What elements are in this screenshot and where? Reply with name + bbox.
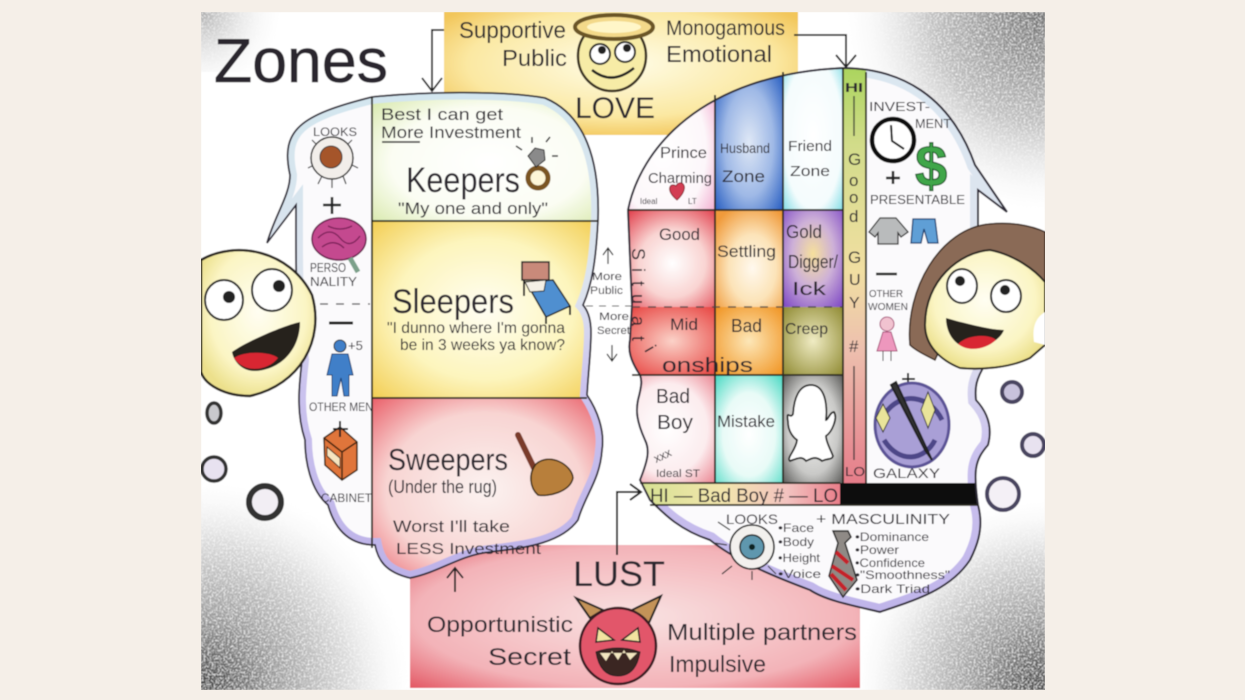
good guy scale: d: [849, 207, 858, 226]
plus sign: [886, 171, 900, 184]
text: monogamous emotional: Emotional: [666, 41, 772, 67]
middle labels: more public more secret: Secret: [597, 325, 630, 337]
section: masculinity list: •"Smoothness": [855, 568, 950, 582]
icon: left man's face: [201, 250, 315, 396]
panel: left head: [267, 90, 607, 583]
cell labels: top row: Charming: [648, 170, 712, 187]
cell labels: middle rows: Good: [659, 225, 700, 244]
icon: blue man: [327, 338, 363, 396]
label: situationships: [628, 248, 753, 377]
icon: diamond ring: [516, 137, 558, 188]
thought bubbles: left: [202, 403, 281, 518]
middle labels: more public more secret: More: [599, 311, 629, 323]
label: personality: [310, 262, 357, 287]
label: other women: WOMEN: [868, 302, 908, 313]
icon: galaxy: [875, 373, 949, 467]
label: situationships: i: [628, 268, 648, 272]
text: lust: LUST: [573, 555, 665, 594]
sweepers text: LESS Investment: [396, 541, 542, 558]
panel: right head: [620, 60, 1007, 612]
icon: ghost: [787, 385, 835, 461]
sleepers text: "I dunno where I'm gonna: [387, 320, 565, 337]
cell labels: middle rows: Creep: [785, 321, 828, 338]
good guy scale: [845, 80, 865, 479]
icon: bed: [522, 262, 570, 324]
section: masculinity list: •Power: [855, 543, 899, 557]
middle labels: more public more secret: Public: [590, 285, 624, 297]
icon: heart: [670, 183, 684, 200]
arrow: lust to right head: [617, 484, 641, 555]
icon: angel face: [575, 15, 653, 91]
cell labels: bottom row: [651, 386, 775, 480]
sweepers text: Worst I'll take: [393, 517, 510, 536]
good guy scale: HI: [845, 80, 863, 95]
label: personality: NALITY: [310, 274, 357, 289]
paper sheet: [201, 12, 1045, 690]
zone: sweepers fill: [372, 398, 596, 572]
good guy scale: o: [849, 188, 858, 207]
cell labels: middle rows: Bad: [731, 316, 762, 336]
good guy scale: G: [848, 248, 861, 267]
section: masculinity list: + MASCULINITY: [816, 511, 950, 528]
text: monogamous emotional: [666, 20, 785, 63]
section: looks list: LOOKS: [726, 511, 778, 527]
icon: broom and dirt pile: [518, 435, 573, 495]
middle labels: more public more secret: More: [592, 271, 622, 283]
keepers text: "My one and only": [398, 199, 548, 218]
cell labels: top row: [640, 138, 832, 206]
icon: shirt: [869, 218, 908, 244]
good guy scale: U: [849, 272, 861, 289]
icon: tie: [829, 531, 857, 597]
cell labels: middle rows: Gold: [786, 222, 822, 242]
thought bubbles: right: [987, 382, 1044, 510]
icon: pants: [911, 219, 938, 243]
cell labels: bottom row: Boy: [657, 412, 693, 434]
text: multiple partners impulsive: Impulsive: [669, 651, 766, 677]
cell labels: middle rows: Ick: [792, 279, 827, 299]
sleepers text: Sleepers: [392, 283, 514, 321]
label: investment: MENT: [915, 116, 951, 131]
label: situationships: t: [628, 281, 648, 286]
cell labels: top row: Friend: [788, 138, 832, 155]
cell labels: top row: Zone: [722, 167, 765, 186]
panel: love box: [444, 12, 798, 135]
zone: keepers fill: [372, 100, 592, 221]
icon: eye: [308, 137, 358, 188]
label: situationships: i: [641, 342, 660, 355]
section: masculinity list: •Confidence: [855, 556, 925, 570]
cell labels: top row: Husband: [720, 140, 770, 156]
good guy scale: Y: [849, 295, 860, 312]
cell labels: bottom row: xxx: [651, 445, 674, 466]
label: situationships: S: [628, 248, 648, 260]
cell labels: top row: Zone: [790, 163, 830, 180]
good guy scale: G: [848, 150, 861, 169]
cell labels: middle rows: Digger/: [788, 252, 838, 272]
sweepers text: (Under the rug): [388, 477, 497, 497]
text: title zones: Zones: [214, 27, 388, 96]
pencil-shaded corners: [201, 12, 1045, 690]
label: situationships: t: [628, 336, 648, 341]
label: galaxy: GALAXY: [873, 465, 941, 481]
text: multiple partners impulsive: Multiple partners: [667, 619, 857, 645]
keepers text: Keepers: [406, 161, 520, 200]
text: supportive public: Public: [502, 45, 567, 71]
cell labels: middle rows: Mid: [670, 315, 698, 334]
sleepers text: be in 3 weeks ya know?: [400, 337, 565, 354]
keepers text: Best I can get: [381, 105, 503, 124]
keepers text: [381, 105, 548, 218]
bad boy scale: HI — Bad Boy # — LO: [650, 486, 838, 507]
section: looks list: •Body: [778, 535, 814, 549]
icon: dollar sign: $: [915, 134, 947, 199]
section: looks list: •Height: [778, 551, 821, 565]
text: supportive public: [460, 20, 567, 67]
cell labels: bottom row: Mistake: [717, 412, 775, 431]
cell labels: bottom row: Ideal ST: [656, 468, 700, 480]
cell labels: middle rows: Settling: [717, 242, 776, 261]
label: presentable: PRESENTABLE: [870, 192, 965, 207]
text: opportunistic secret: Secret: [488, 644, 571, 671]
cell labels: bottom row: Bad: [656, 386, 690, 408]
label: cabinet: CABINET: [321, 491, 373, 505]
sleepers text: [387, 283, 565, 354]
cell labels: top row: Ideal: [640, 197, 658, 206]
cell labels: middle rows: [659, 222, 838, 338]
section: looks list: [714, 511, 821, 581]
sweepers text: [388, 442, 542, 558]
icon: clock: [872, 119, 914, 161]
section: masculinity list: [816, 511, 950, 597]
label: investment: INVEST-: [869, 99, 930, 114]
label: investment: [869, 99, 951, 131]
label: personality: PERSO: [310, 260, 346, 275]
panel: lust box: [410, 545, 860, 688]
section: looks list: •Face: [778, 521, 814, 535]
good guy scale: o: [849, 171, 858, 190]
label: situationships: onships: [662, 355, 753, 377]
icon: brain: [312, 218, 366, 272]
cell labels: top row: Prince: [660, 145, 707, 162]
label: other women: [868, 289, 908, 313]
icon: devil face: [576, 596, 661, 684]
text: opportunistic secret: Opportunistic: [427, 612, 573, 637]
arrow: love to right head: [794, 35, 856, 67]
icon: pink woman: [877, 317, 897, 361]
icon: blue eye: [714, 522, 776, 580]
text: monogamous emotional: Monogamous: [666, 17, 785, 40]
label: situationships: a: [628, 316, 648, 327]
good guy scale: LO: [845, 464, 865, 479]
icon: woman's face with hair: [910, 223, 1045, 369]
cell labels: top row: LT: [688, 197, 697, 206]
label: situationships: u: [628, 294, 648, 304]
plus sign: [323, 197, 341, 214]
arrow: lust to left head: [447, 568, 463, 592]
zone: sleepers fill: [372, 221, 597, 398]
icon: blue man: +5: [348, 338, 363, 353]
column: looks and personality: [308, 125, 373, 505]
label: other women: OTHER: [869, 289, 903, 300]
section: masculinity list: •Dominance: [855, 530, 929, 544]
middle labels: more public more secret: [586, 248, 636, 361]
section: masculinity list: •Dark Triad: [855, 582, 930, 596]
grid: relationship cells: [620, 60, 990, 505]
minus sign: [329, 322, 353, 324]
sweepers text: Sweepers: [388, 442, 508, 477]
text: love: LOVE: [575, 92, 655, 125]
arrow: love to left head: [422, 30, 444, 91]
label: looks: LOOKS: [313, 125, 357, 139]
column: investment and presentable: [868, 99, 965, 481]
label: other men: OTHER MEN: [309, 400, 373, 414]
text: opportunistic secret: [428, 615, 573, 666]
minus sign: [876, 273, 897, 275]
good guy scale: #: [849, 337, 859, 356]
text: supportive public: Supportive: [459, 17, 566, 43]
keepers text: More Investment: [381, 123, 521, 142]
section: looks list: •Voice: [778, 567, 821, 581]
text: multiple partners impulsive: [667, 619, 857, 677]
icon: cabinet: [324, 421, 357, 480]
